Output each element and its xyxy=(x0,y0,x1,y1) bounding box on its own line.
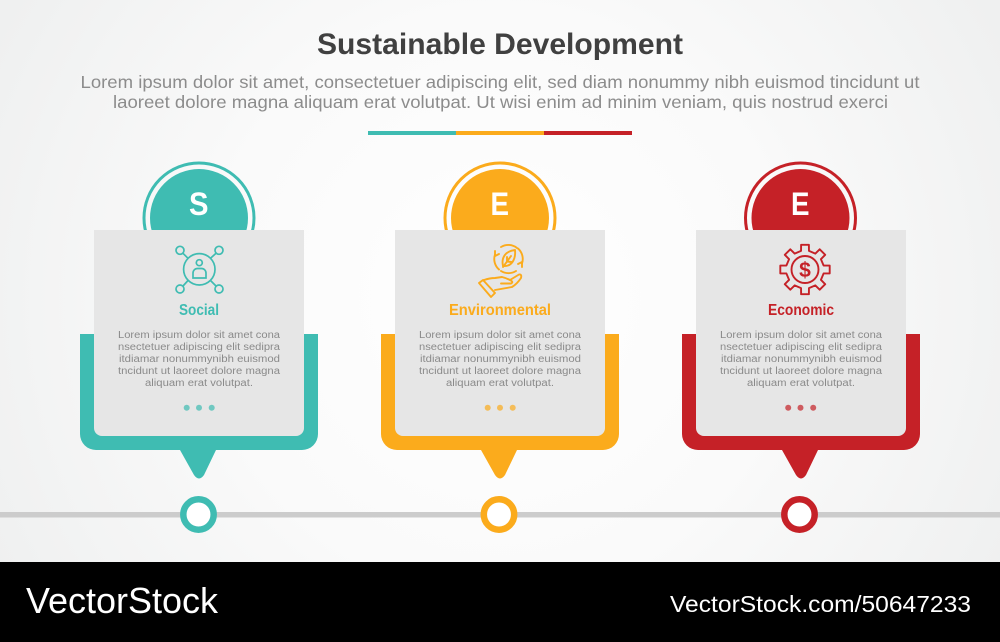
timeline line xyxy=(0,512,1000,518)
timeline marker xyxy=(484,499,514,530)
footer logo: VectorStock xyxy=(26,580,219,621)
body text: Lorem ipsum dolor sit amet cona xyxy=(419,330,581,341)
body text: itdiamar nonummynibh euismod xyxy=(721,354,882,365)
panel: environmental xyxy=(381,163,619,530)
panel: economic xyxy=(682,163,920,530)
grey card xyxy=(696,230,906,436)
panel: social xyxy=(80,163,318,530)
intro text xyxy=(80,72,920,112)
body text: nsectetuer adipiscing elit sedipra xyxy=(720,342,882,353)
body text: Lorem ipsum dolor sit amet cona xyxy=(720,330,882,341)
heading: social: Social xyxy=(179,302,219,319)
timeline marker xyxy=(183,499,214,530)
heading: economic: Economic xyxy=(768,302,834,319)
body text: tncidunt ut laoreet dolore magna xyxy=(720,366,882,377)
icon: dollar gear xyxy=(780,245,830,294)
intro text: Lorem ipsum dolor sit amet, consectetuer adipiscing elit, sed diam nonummy nibh euismod tincidunt ut xyxy=(80,72,920,92)
dots xyxy=(785,405,816,411)
heading: environmental: Environmental xyxy=(449,302,551,319)
body text: aliquam erat volutpat. xyxy=(446,378,554,389)
badge circle E xyxy=(445,163,555,273)
speech bubble frame xyxy=(682,334,920,478)
badge circle E xyxy=(746,163,856,273)
badge circle S xyxy=(144,163,254,273)
speech bubble frame xyxy=(80,334,318,478)
title: Sustainable Development xyxy=(317,28,683,61)
body text: nsectetuer adipiscing elit sedipra xyxy=(419,342,581,353)
icon: hand holding leaf xyxy=(479,245,523,297)
body text xyxy=(118,330,280,389)
body text: tncidunt ut laoreet dolore magna xyxy=(419,366,581,377)
badge circle E: E xyxy=(791,186,810,222)
body text: Lorem ipsum dolor sit amet cona xyxy=(118,330,280,341)
timeline marker xyxy=(784,499,815,530)
dots xyxy=(485,405,516,411)
body text: aliquam erat volutpat. xyxy=(145,378,253,389)
intro text: laoreet dolore magna aliquam erat volutpat. Ut wisi enim ad minim veniam, quis nostrud exerci xyxy=(113,92,888,112)
speech bubble frame xyxy=(381,334,619,478)
body text: itdiamar nonummynibh euismod xyxy=(420,354,581,365)
tri-colour title rule xyxy=(368,131,632,135)
grey card xyxy=(395,230,605,436)
badge circle E: E xyxy=(490,186,509,222)
body text xyxy=(720,330,882,389)
body text xyxy=(419,330,581,389)
body text: itdiamar nonummynibh euismod xyxy=(119,354,280,365)
footer bar xyxy=(0,562,1000,642)
footer url: VectorStock.com/50647233 xyxy=(670,591,971,617)
grey card xyxy=(94,230,304,436)
icon: people network xyxy=(176,246,223,293)
badge circle S: S xyxy=(189,186,208,222)
body text: aliquam erat volutpat. xyxy=(747,378,855,389)
icon: dollar gear: $ xyxy=(799,259,811,282)
dots xyxy=(184,405,215,411)
body text: tncidunt ut laoreet dolore magna xyxy=(118,366,280,377)
body text: nsectetuer adipiscing elit sedipra xyxy=(118,342,280,353)
